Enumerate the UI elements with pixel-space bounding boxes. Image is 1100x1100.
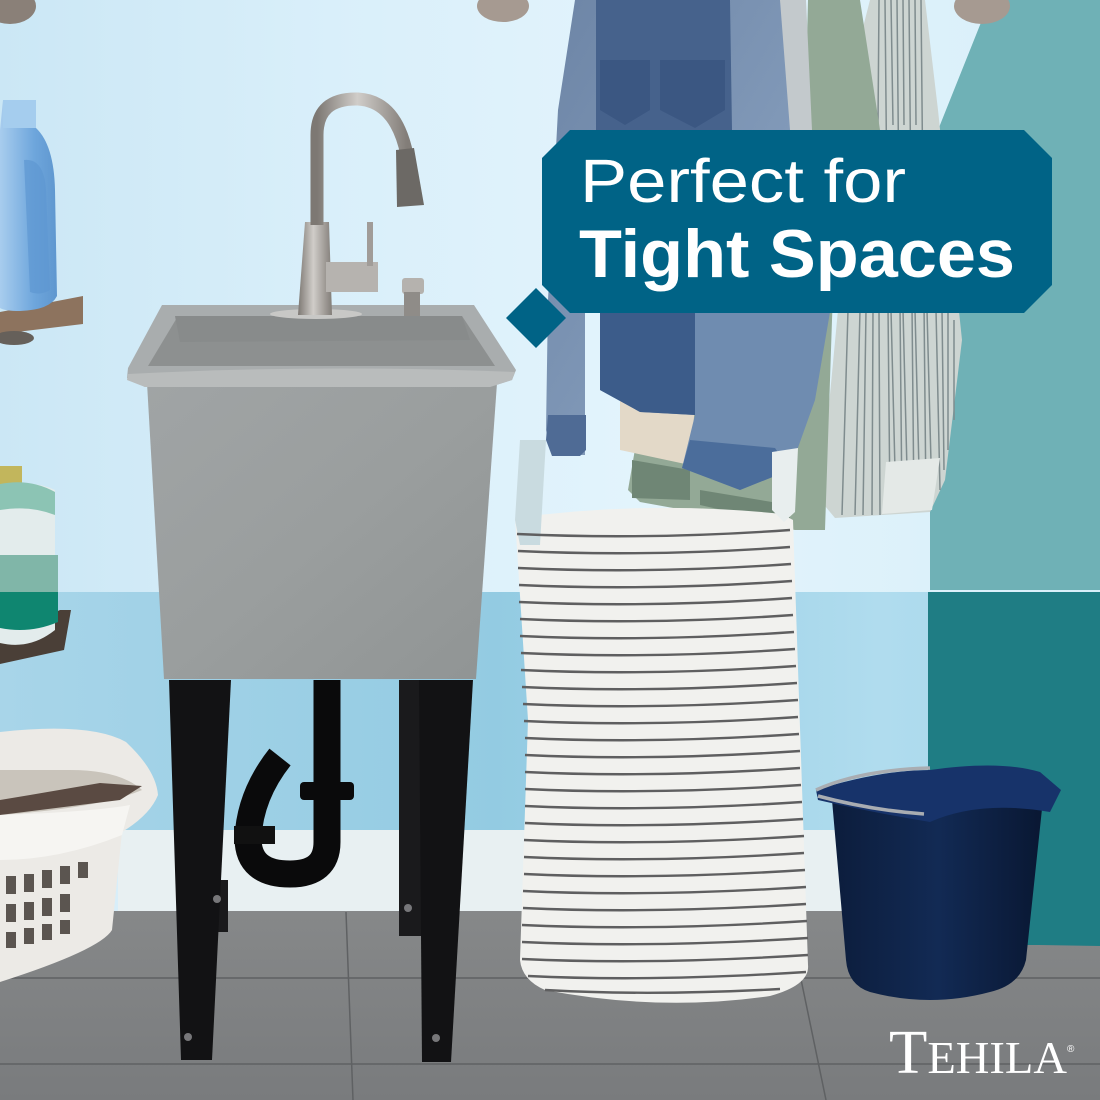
hanging clothes xyxy=(546,0,962,530)
brand logo: TEHILA xyxy=(889,1019,1067,1087)
registered mark: ® xyxy=(1067,1044,1075,1055)
tub rim xyxy=(127,305,516,387)
floor tiles xyxy=(0,911,1100,1100)
tub body xyxy=(147,383,497,679)
front leg left xyxy=(169,680,231,1060)
callout pointer diamond xyxy=(506,288,566,348)
lower shelf with wipes tub xyxy=(0,466,71,664)
laundry basket xyxy=(0,729,158,982)
wall pipe flanges xyxy=(0,0,1010,24)
heading: Tight Spaces: Tight Spaces xyxy=(579,216,1015,292)
patterned shirt xyxy=(628,0,880,530)
striped shirt xyxy=(820,0,962,518)
pipe: P-trap xyxy=(234,680,354,874)
wall lower band xyxy=(0,592,1100,832)
baseboard xyxy=(118,830,848,912)
heading: Perfect for: Perfect for xyxy=(580,147,906,215)
callout box xyxy=(542,130,1052,313)
front leg right xyxy=(419,680,473,1062)
callout badge xyxy=(506,130,1052,348)
denim jacket xyxy=(546,0,810,455)
wall upper xyxy=(0,0,1100,593)
utility sink xyxy=(127,99,516,1062)
soap dispenser xyxy=(402,278,424,316)
faucet xyxy=(270,99,424,319)
laundry hamper xyxy=(515,440,808,1003)
cream sweater xyxy=(620,400,695,465)
ironing board panel xyxy=(928,0,1100,946)
mop bucket xyxy=(816,765,1061,1000)
left shelf with detergent bottle xyxy=(0,100,83,345)
back legs xyxy=(208,680,421,936)
